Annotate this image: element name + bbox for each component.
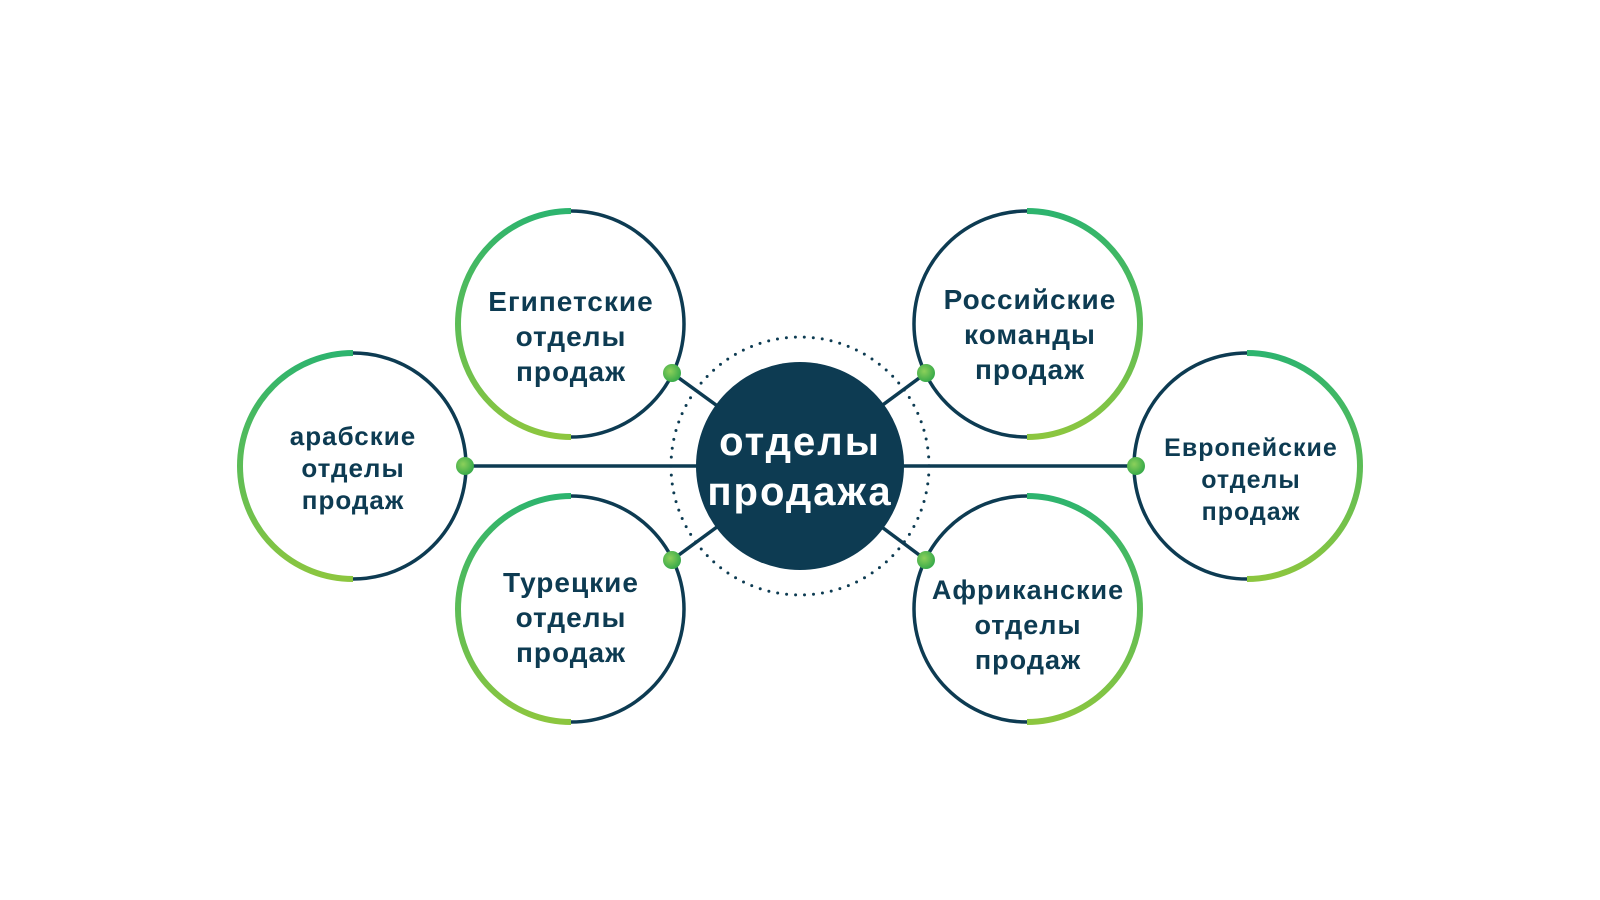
circle: Russian: команды <box>964 319 1096 350</box>
circle: European <box>1134 353 1360 579</box>
center circle: отделы <box>719 420 881 464</box>
dotted ring <box>671 337 929 595</box>
circle: arabic <box>240 353 466 579</box>
circle: Turkish: продаж <box>516 637 626 668</box>
circle: arabic: отделы <box>301 453 405 483</box>
circle: Egyptian: Египетские <box>488 286 654 317</box>
circle: Russian <box>914 211 1140 437</box>
circle: European: Европейские <box>1164 434 1338 462</box>
circle: African: продаж <box>975 645 1081 675</box>
connector lines <box>465 373 1136 560</box>
circle: Russian: продаж <box>975 354 1085 385</box>
circle: African: Африканские <box>932 575 1124 605</box>
circle: arabic: арабские <box>290 421 416 451</box>
circle: African <box>914 496 1140 722</box>
circle: European: продаж <box>1202 498 1300 526</box>
circle: Turkish: отделы <box>516 602 626 633</box>
circle: African: отделы <box>974 610 1082 640</box>
circle: arabic: продаж <box>302 485 404 515</box>
center circle <box>696 362 904 570</box>
circle: Turkish: Турецкие <box>503 567 639 598</box>
circle: Egyptian: отделы <box>516 321 626 352</box>
circle: Turkish <box>458 496 684 722</box>
circle: Egyptian <box>458 211 684 437</box>
circle: European: отделы <box>1201 466 1301 494</box>
circle: Egyptian: продаж <box>516 356 626 387</box>
connector dots <box>456 364 1145 569</box>
center circle: продажа <box>707 470 893 514</box>
circle: Russian: Российские <box>944 284 1116 315</box>
